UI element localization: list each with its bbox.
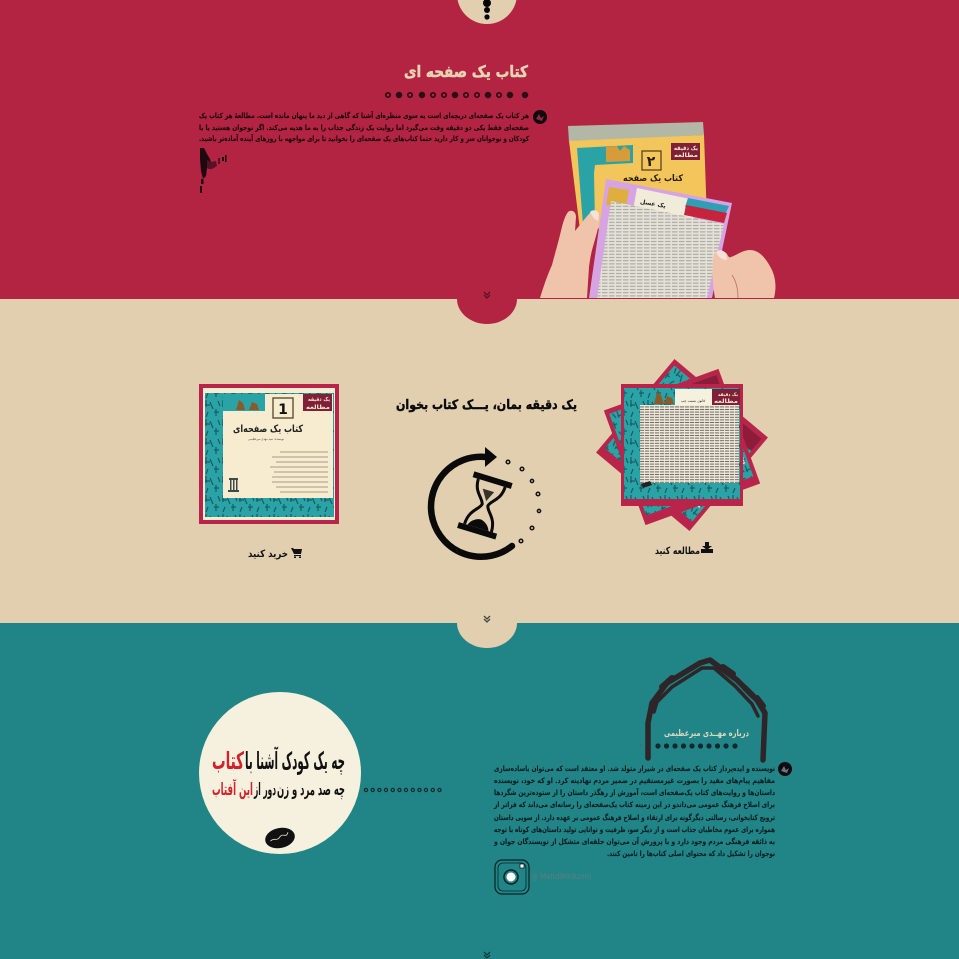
ink scribble	[200, 148, 226, 193]
link: read online: مطالعه کنید	[655, 546, 700, 557]
section tab with chevron	[457, 292, 517, 324]
bottom chevron	[484, 952, 490, 958]
icon: download	[701, 542, 713, 553]
illustration: hands holding books: یک عسل	[639, 198, 666, 210]
calligraphy lines: کتاب	[212, 747, 244, 775]
arch ornament	[648, 660, 765, 760]
page of text	[597, 201, 724, 298]
stacked book pages	[596, 359, 768, 531]
purple sheet	[589, 179, 732, 298]
instagram handle: @ MehdiMirAzimi	[531, 872, 591, 881]
book cover: volume 1	[199, 384, 339, 524]
panel: book intro	[0, 0, 959, 299]
book cover: volume 1: نویسنده: سید مهدی میرعظیمی	[248, 437, 284, 441]
text block: author biography: نوجوان را تشکیل داد که محتوای اصلی کتاب‌ها را تامین کنند.	[607, 849, 775, 858]
calligraphy lines	[212, 746, 345, 800]
icon: round emblem	[778, 762, 792, 776]
illustration: hands holding books: ٢	[647, 154, 656, 170]
book cover: volume 1: یک دقیقه	[308, 396, 330, 403]
seal logo	[263, 825, 297, 851]
quote circle: چه صد مرد و زن	[277, 780, 345, 800]
text block: author biography: ترویج کتابخوانی، رسالتی دیگرگونه برای ارتقاء و اصلاح فرهنگ عمومی بر عهده دارد. از سویی داستان	[494, 813, 775, 822]
text block: author biography: همواره برای عموم مخاطبان جذاب است و از دیگر سو، ظرفیت و توانایی تولید داستان‌های کوتاه با توجه	[494, 825, 775, 834]
top tab with dots	[457, 0, 517, 24]
illustration: hands holding books	[540, 122, 775, 298]
divider: small dots row	[364, 788, 441, 792]
text block: book description: هر کتاب یک صفحه‌ای دریچه‌ای است به سوی منظره‌ای آشنا که گاهی از دید ما پنهان مانده است. مطالعهٔ هر کتاب یک	[199, 111, 529, 120]
book pages	[568, 122, 704, 142]
right hand	[713, 250, 775, 298]
illustration: hands holding books: یک دقیقه	[674, 145, 698, 152]
panel: about the author	[0, 616, 959, 959]
stacked book pages: مطالعه	[714, 398, 738, 405]
heading: about author: درباره مهــدی میرعظیمی	[664, 729, 749, 739]
divider: dots row	[386, 93, 527, 97]
text block: book description	[199, 111, 530, 143]
book cover: volume 1: مطالعه	[306, 404, 330, 411]
text block: book description: کودکان و نوجوانان سر و کار دارید حتما کتاب‌های یک صفحه‌ای را بخوانید تا برای مواجهه با روزهای آینده آماده‌تر باشید.	[199, 134, 530, 143]
calligraphy lines: دور از	[254, 780, 276, 800]
left hand	[540, 211, 599, 298]
icon: instagram	[495, 860, 529, 894]
text block: author biography: نویسنده و ایده‌پرداز کتاب یک صفحه‌ای در شیراز متولد شد. او معتقد است که می‌توان باساده‌سازی	[494, 764, 775, 773]
panel: read and buy	[0, 292, 959, 623]
section tab with chevron	[457, 616, 517, 648]
illustration: hands holding books: مطالعه	[674, 152, 698, 159]
stacked book pages: یک دقیقه	[718, 392, 738, 398]
quote circle	[199, 692, 361, 854]
illustration: hands holding books: کتاب یک صفحه	[623, 174, 684, 184]
heading: stay one minute read a book: یک دقیقه بمان، یـــک کتاب بخوان	[396, 398, 577, 413]
text block: author biography: به ذائقه فرهنگی مردم وجود دارد و با پرورش آن می‌توان حلقه‌ای متشکل از نویسندگان جوان و	[493, 836, 775, 846]
panel: about the author: چه یک کودک آشنا با	[245, 746, 345, 775]
text block: book description: صفحه‌ای فقط یکی دو دقیقه وقت می‌گیرد اما روایت یک زندگی جذاب را به ما هدیه می‌کند. اگر نوجوان هستید یا با	[199, 123, 529, 132]
divider: dots row	[640, 743, 738, 749]
icon: round emblem	[533, 110, 547, 124]
heading: one page book: کتاب یک صفحه ای	[404, 62, 529, 81]
text block: author biography: مفاهیم پیام‌های مفید را بصورت غیرمستقیم در ضمیر مردم نهادینه کرد. او که خود، نویسنده	[494, 776, 775, 785]
text block: author biography: داستان‌ها و روایت‌های کتاب یک‌صفحه‌ای است، آموزش از رهگذر داستان را از ستوده‌ترین شگردها	[494, 787, 775, 797]
icon: cart	[291, 548, 302, 558]
stacked book pages: قانون نسبت چپ	[681, 398, 705, 403]
text block: author biography: برای اصلاح فرهنگ عمومی می‌داندو در این زمینه کتاب یک‌صفحه‌ای را رسانه‌ای می‌داند که فراتر از	[493, 800, 775, 809]
yellow book cover	[569, 135, 707, 230]
text block: author biography	[493, 764, 775, 858]
calligraphy lines: این آفتاب	[212, 778, 253, 800]
book cover: volume 1: کتاب یک صفحه‌ای	[233, 424, 303, 435]
link: buy: خرید کنید	[248, 549, 288, 560]
icon: hourglass in rotating arrow	[431, 447, 541, 557]
book cover: volume 1: 1	[278, 402, 288, 418]
